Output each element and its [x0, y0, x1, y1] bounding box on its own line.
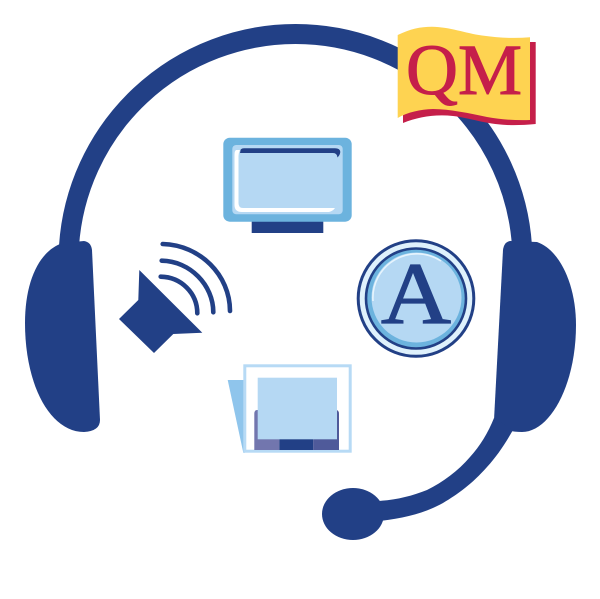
- document frame: [245, 366, 350, 451]
- monitor frame: [223, 138, 352, 222]
- icon: speaker: [119, 244, 230, 353]
- icon: document: [228, 366, 350, 453]
- document fold: [228, 380, 245, 453]
- speaker body: [119, 270, 202, 353]
- microphone: [322, 488, 384, 540]
- monitor stand: [252, 221, 323, 233]
- icon: monitor: [223, 138, 352, 233]
- monitor glass: [232, 145, 343, 214]
- QM letters: QM: [406, 30, 522, 110]
- headset: [25, 34, 576, 540]
- icon: letter A badge: [358, 241, 474, 356]
- left ear cushion: [25, 241, 100, 432]
- microphone boom: [378, 418, 513, 521]
- monitor highlight: [234, 150, 335, 212]
- headband: [69, 34, 522, 246]
- document page: [258, 378, 337, 439]
- QM logo flag: [398, 27, 536, 125]
- sound waves: [161, 244, 230, 313]
- flag red shadow: [403, 42, 536, 125]
- document tray: [254, 410, 339, 450]
- monitor top shadow: [240, 148, 340, 158]
- badge outer ring: [358, 241, 474, 356]
- letter A: A: [381, 246, 451, 343]
- badge highlight: [373, 254, 441, 301]
- badge inner disc: [366, 248, 466, 348]
- badge face: [372, 252, 462, 342]
- flag yellow banner: [398, 27, 530, 120]
- right ear cushion: [494, 241, 576, 432]
